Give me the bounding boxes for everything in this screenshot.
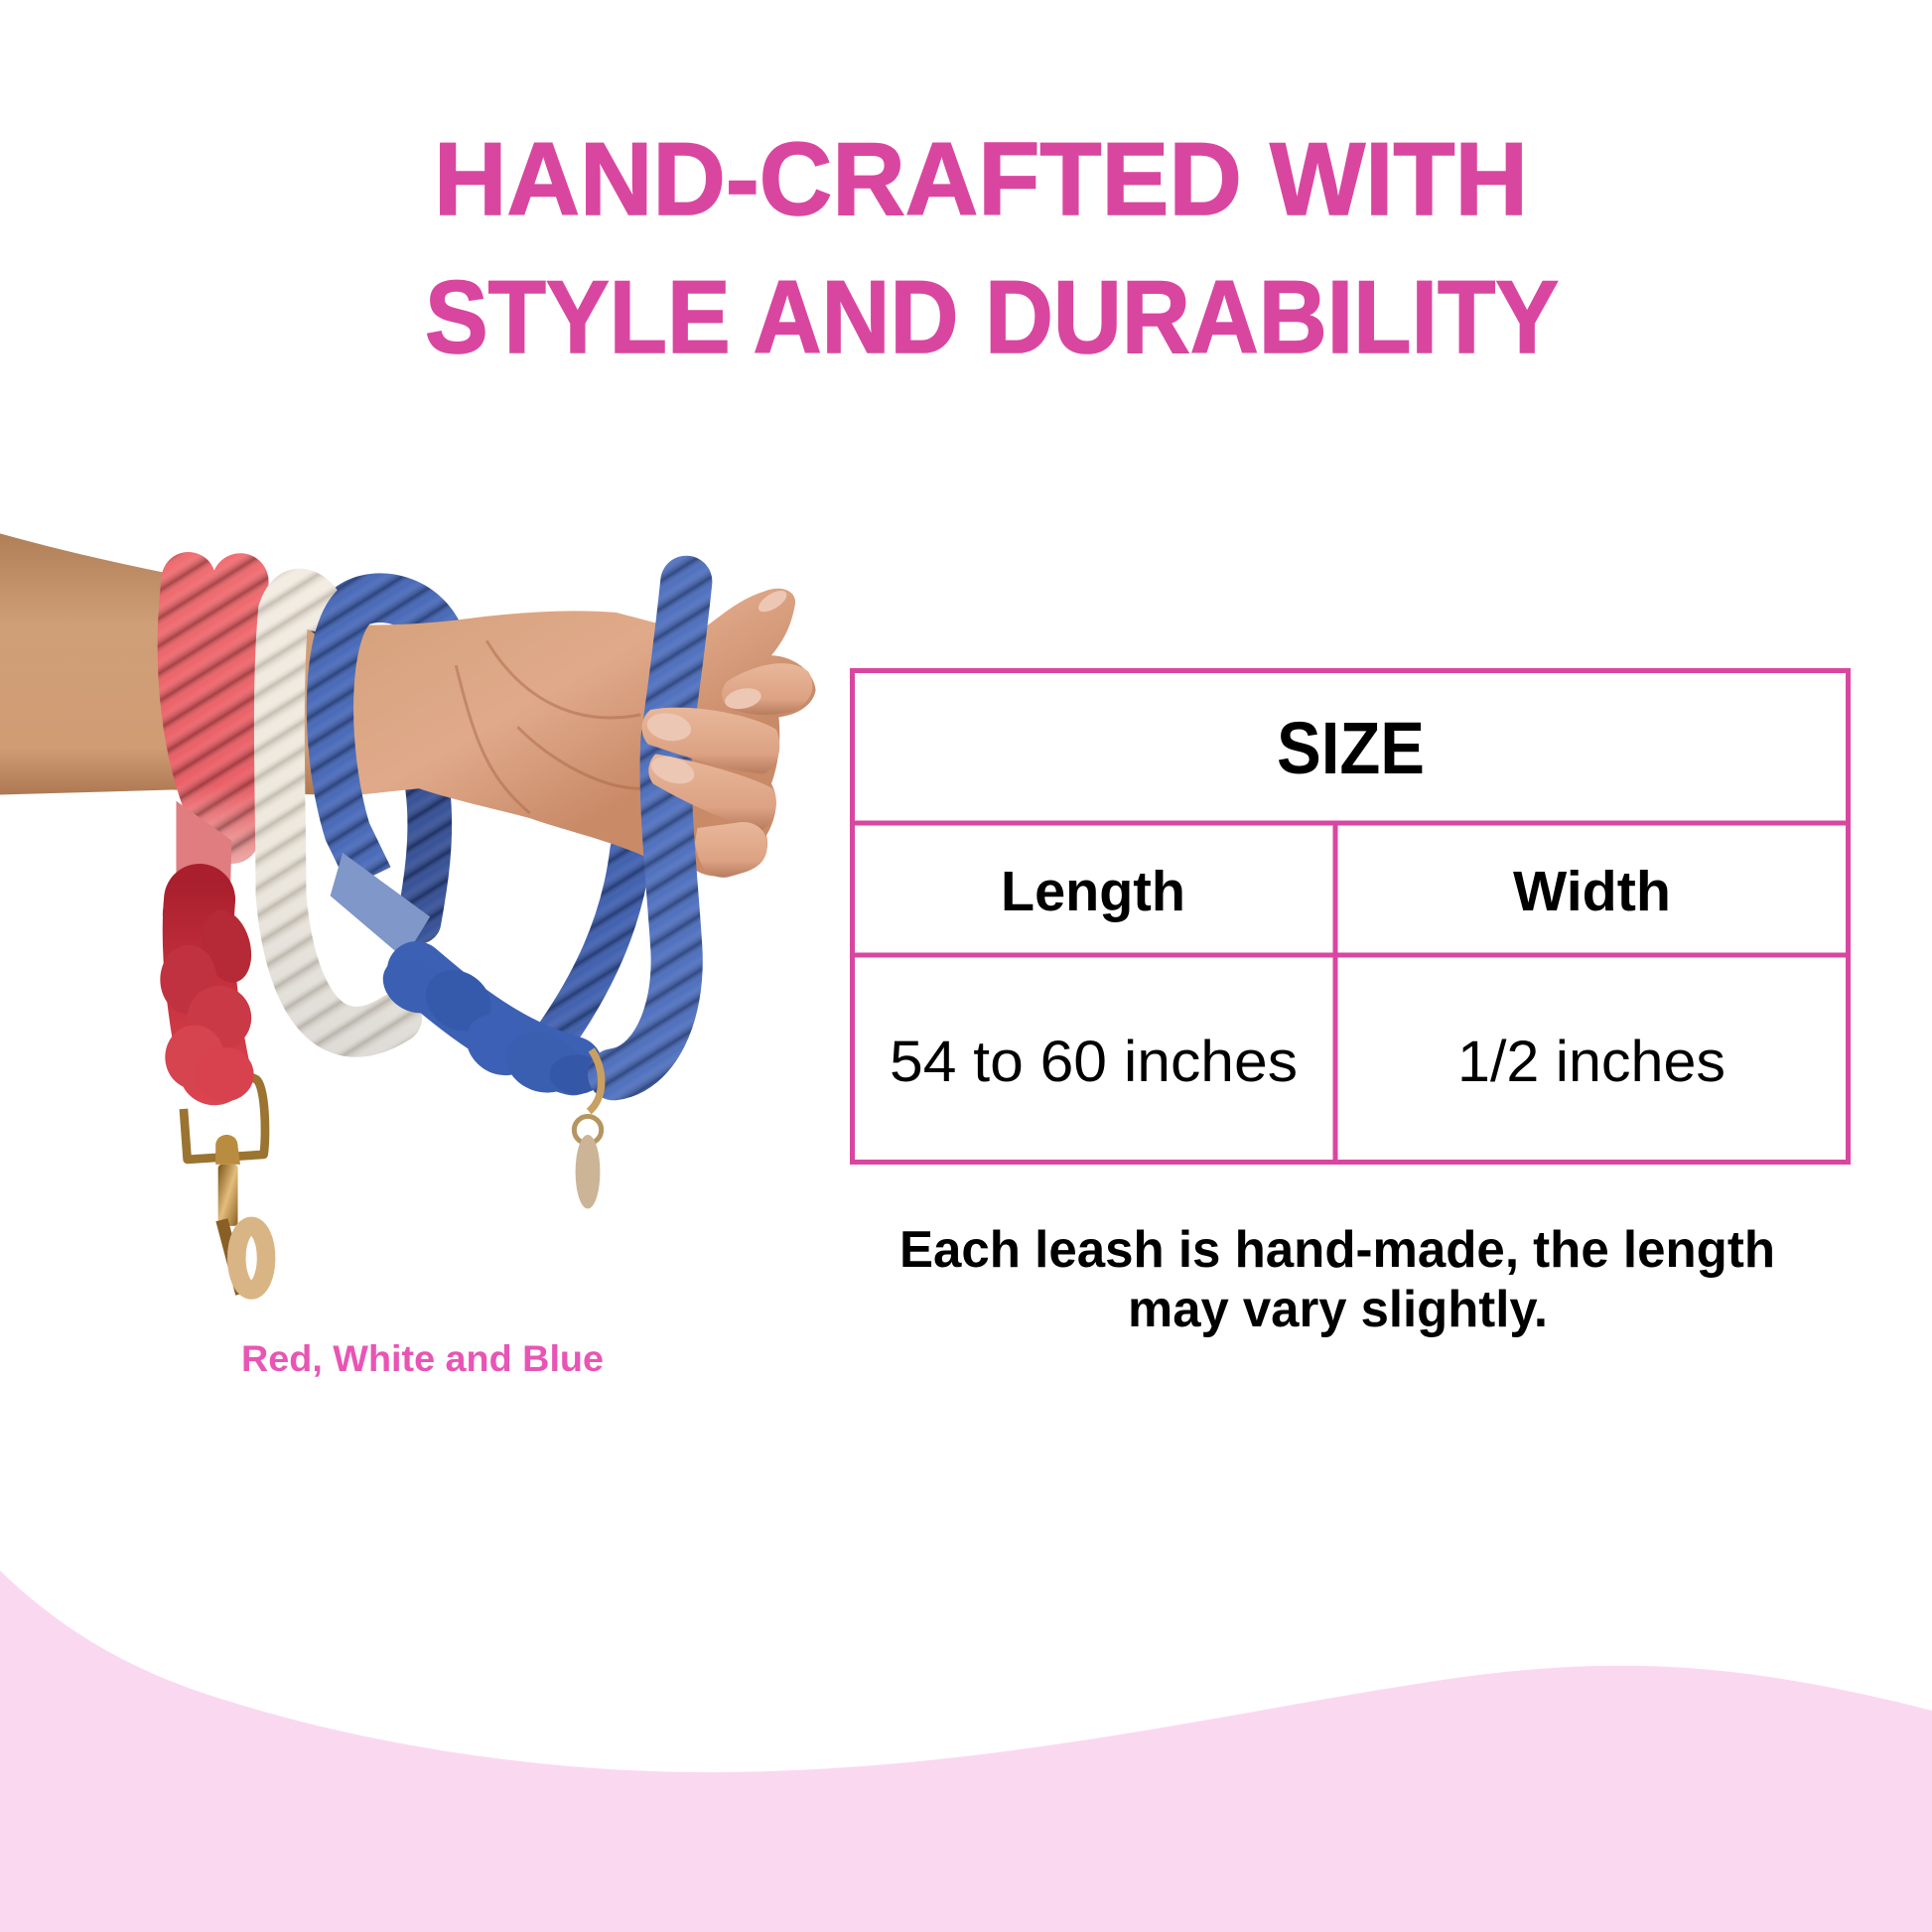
finger nails <box>645 587 790 788</box>
note under table: Each leash is hand-made, the length <box>899 1221 1775 1279</box>
table grid <box>852 671 1849 1162</box>
background wave <box>0 1571 1932 1932</box>
white leash <box>279 594 397 1032</box>
width value: 1/2 inches <box>1457 1030 1725 1094</box>
blue leash wrist strand <box>330 604 369 878</box>
note under table <box>899 1221 1775 1338</box>
back rope strand <box>419 788 630 1041</box>
column header: length: Length <box>1001 860 1185 923</box>
photo caption: Red, White and Blue <box>241 1338 604 1379</box>
arm and hand <box>0 533 816 876</box>
gold swivel clasp <box>184 1069 266 1294</box>
column header: width: Width <box>1513 860 1671 923</box>
product photo: hand holding three rope leashes <box>0 533 816 1294</box>
table heading: SIZE <box>1277 707 1425 789</box>
blue leash front strand <box>614 582 686 1074</box>
fingers <box>641 663 812 878</box>
blue braided section <box>372 947 604 1103</box>
title <box>425 122 1559 375</box>
gold ring and tag <box>574 1049 602 1209</box>
title: STYLE AND DURABILITY <box>425 260 1559 375</box>
note under table: may vary slightly. <box>1128 1281 1548 1338</box>
title: HAND-CRAFTED WITH <box>434 122 1528 237</box>
size table <box>852 671 1849 1162</box>
red leash strap <box>176 801 231 890</box>
length value: 54 to 60 inches <box>890 1030 1298 1094</box>
red leash coils <box>185 579 240 835</box>
blue leash sleeve <box>331 853 430 959</box>
red braided section <box>160 883 259 1102</box>
blue leash upper loop behind wrist <box>323 598 441 640</box>
